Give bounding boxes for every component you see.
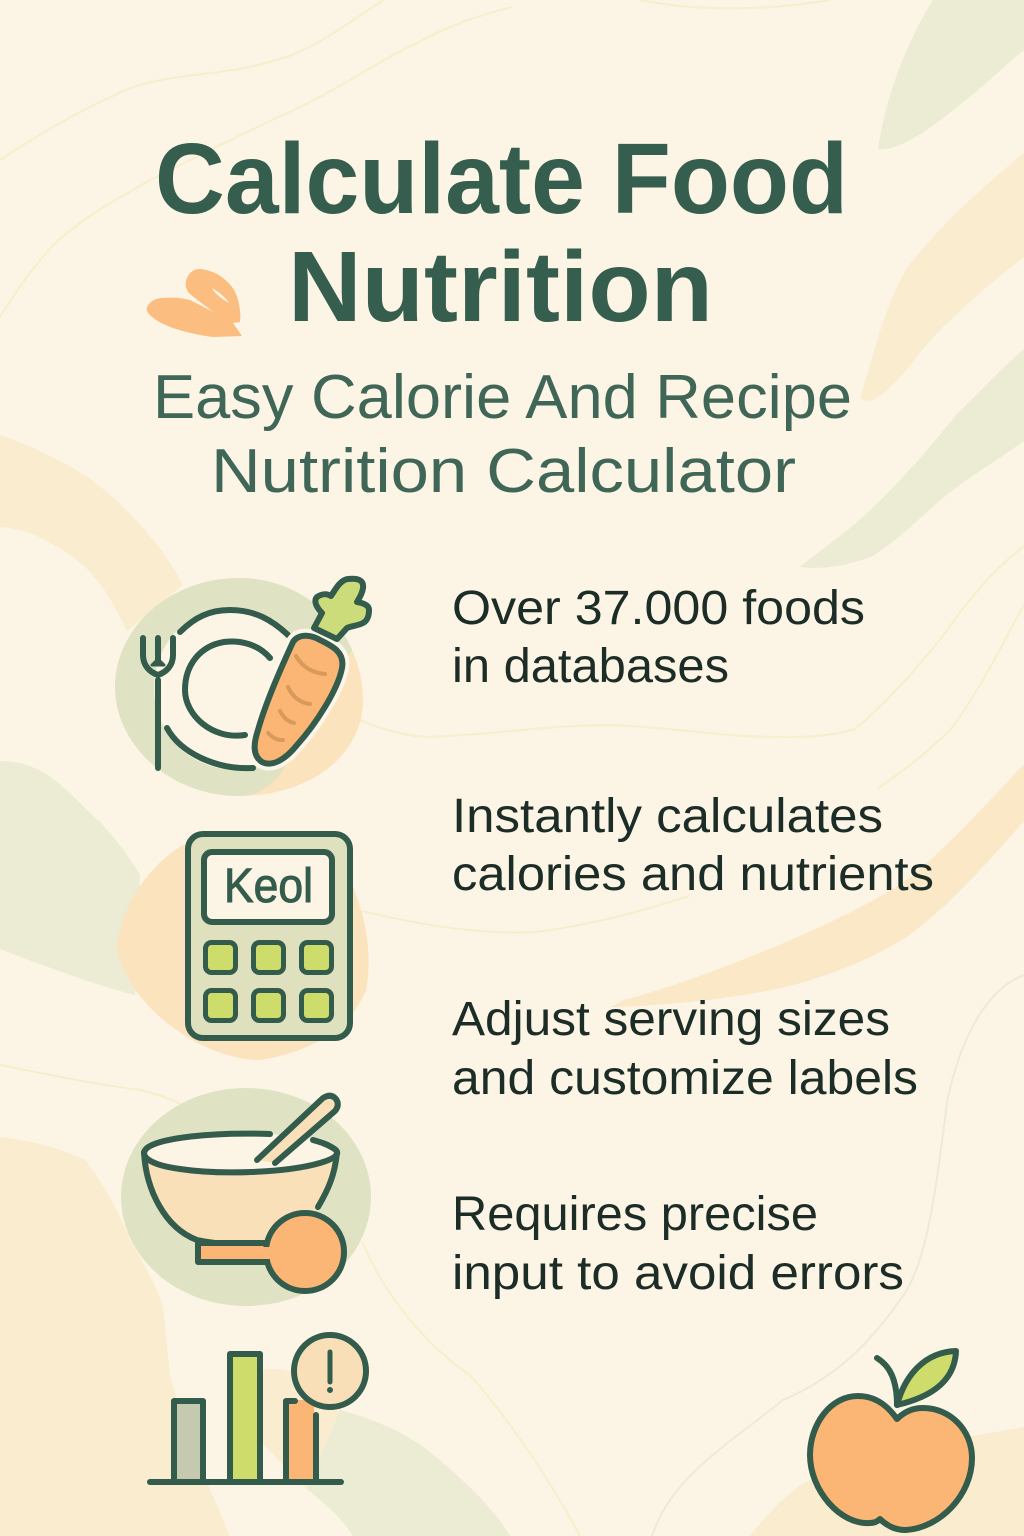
feature text: instant calculation [452, 790, 934, 901]
icon: plate, fork and carrot [115, 578, 369, 796]
feature text: serving sizes [452, 993, 918, 1105]
calculator screen: Keol [224, 860, 313, 913]
icon: calculator [117, 834, 369, 1060]
feature text: precise input [452, 1188, 904, 1300]
icon: apple [810, 1351, 972, 1530]
feature text: serving sizes: and customize labels [452, 1052, 918, 1105]
subtitle [153, 363, 852, 506]
bar: green [230, 1354, 260, 1482]
title: Calculate Food [155, 123, 848, 235]
feature text: foods database: Over 37.000 foods [452, 582, 865, 635]
calculator screen [204, 852, 332, 922]
feature text: foods database: in databases [452, 640, 729, 693]
bar: orange [289, 1400, 314, 1480]
title [155, 123, 848, 343]
feature text: precise input: input to avoid errors [452, 1247, 904, 1300]
calculator buttons [206, 942, 332, 1020]
subtitle: Nutrition Calculator [211, 437, 796, 506]
bar: grey [174, 1401, 203, 1482]
feature text: foods database [452, 582, 865, 693]
title: Nutrition [288, 231, 713, 343]
icon: leaf accent [147, 269, 242, 337]
feature text: instant calculation: calories and nutrients [452, 848, 934, 901]
icon: bar chart with alert [150, 1335, 366, 1482]
feature text: serving sizes: Adjust serving sizes [452, 993, 890, 1046]
orange bar outline [286, 1401, 316, 1482]
chart baseline [150, 1479, 341, 1485]
icon: bowl and spoon [121, 1088, 371, 1306]
feature text: precise input: Requires precise [452, 1188, 818, 1241]
feature text: instant calculation: Instantly calculates [452, 790, 883, 843]
subtitle: Easy Calorie And Recipe [153, 363, 852, 432]
alert badge [294, 1335, 366, 1407]
